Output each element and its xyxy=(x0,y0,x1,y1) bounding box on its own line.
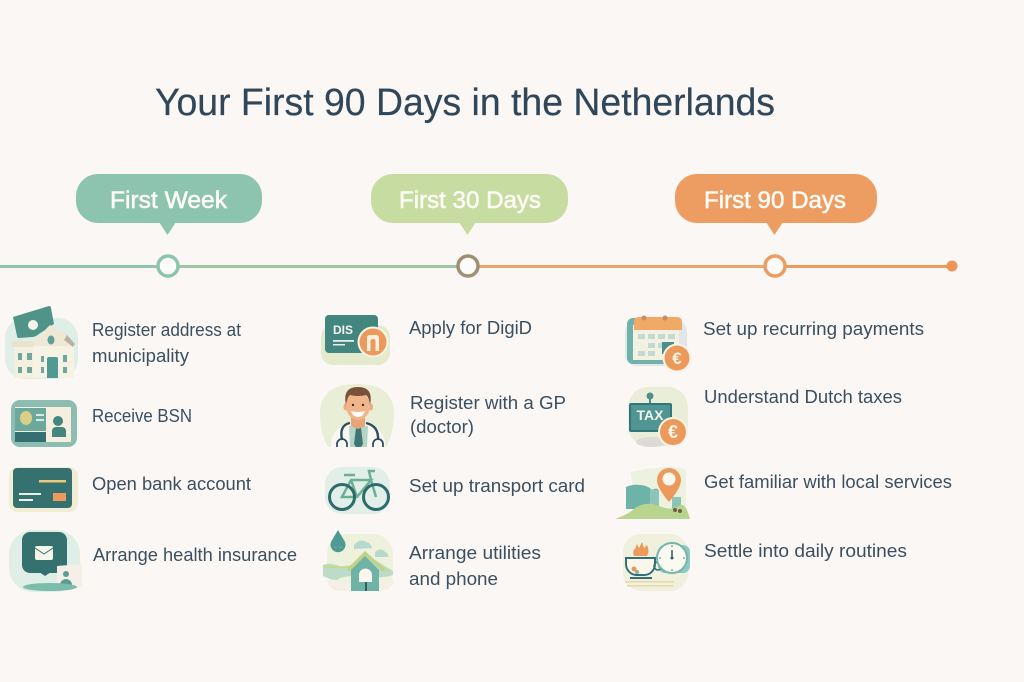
badge: First Week xyxy=(76,174,262,235)
badge: First 90 Days xyxy=(675,174,877,235)
label: Understand Dutch taxes xyxy=(704,386,902,407)
badge: First 30 Days: First 30 Days xyxy=(399,187,541,214)
label: Arrange utilities xyxy=(409,542,541,563)
marker: first week xyxy=(158,256,178,276)
label: Settle into daily routines xyxy=(704,540,907,561)
icon: bicycle xyxy=(325,467,390,514)
label: Open bank account xyxy=(92,473,251,494)
label: Arrange health insurance xyxy=(93,544,297,565)
icon: coffee and clock xyxy=(623,534,690,591)
marker: first 30 days xyxy=(458,256,478,276)
timeline end dot xyxy=(946,260,958,272)
icon: tax sign with euro: TAX xyxy=(637,407,664,423)
icon: doctor xyxy=(320,384,394,447)
label: Register with a GP xyxy=(410,392,566,413)
icon: utilities house xyxy=(323,530,393,591)
title: Your First 90 Days in the Netherlands xyxy=(155,82,775,124)
label: Receive BSN xyxy=(92,405,192,426)
column: first 30 days xyxy=(320,315,585,591)
label: and phone xyxy=(409,568,498,589)
icon: municipality building xyxy=(5,306,78,379)
label: Register address at xyxy=(92,319,241,340)
icon: tax sign with euro xyxy=(628,387,688,447)
badge: First 90 Days: First 90 Days xyxy=(704,187,846,214)
column: first 90 days xyxy=(615,316,952,591)
label: Get familiar with local services xyxy=(704,471,952,492)
icon: BSN id card xyxy=(11,400,77,447)
icon: health insurance xyxy=(9,530,82,592)
icon: DigiD card: DIS xyxy=(333,323,353,337)
icon: calendar with euro xyxy=(625,316,692,372)
badge: First 30 Days xyxy=(371,174,568,235)
icon: map pin over landscape xyxy=(615,468,690,519)
label: (doctor) xyxy=(410,416,474,437)
label: Set up recurring payments xyxy=(703,318,924,339)
icon: tax sign with euro: € xyxy=(668,422,678,442)
label: Apply for DigiD xyxy=(409,317,532,338)
column: first week xyxy=(5,306,297,592)
icon: DigiD card xyxy=(321,315,390,365)
marker: first 90 days xyxy=(765,256,785,276)
timeline xyxy=(0,256,958,276)
badge: First Week: First Week xyxy=(110,187,228,214)
label: Set up transport card xyxy=(409,475,585,496)
icon: bank card xyxy=(9,467,78,512)
label: municipality xyxy=(92,345,190,366)
icon: calendar with euro: € xyxy=(672,349,682,368)
